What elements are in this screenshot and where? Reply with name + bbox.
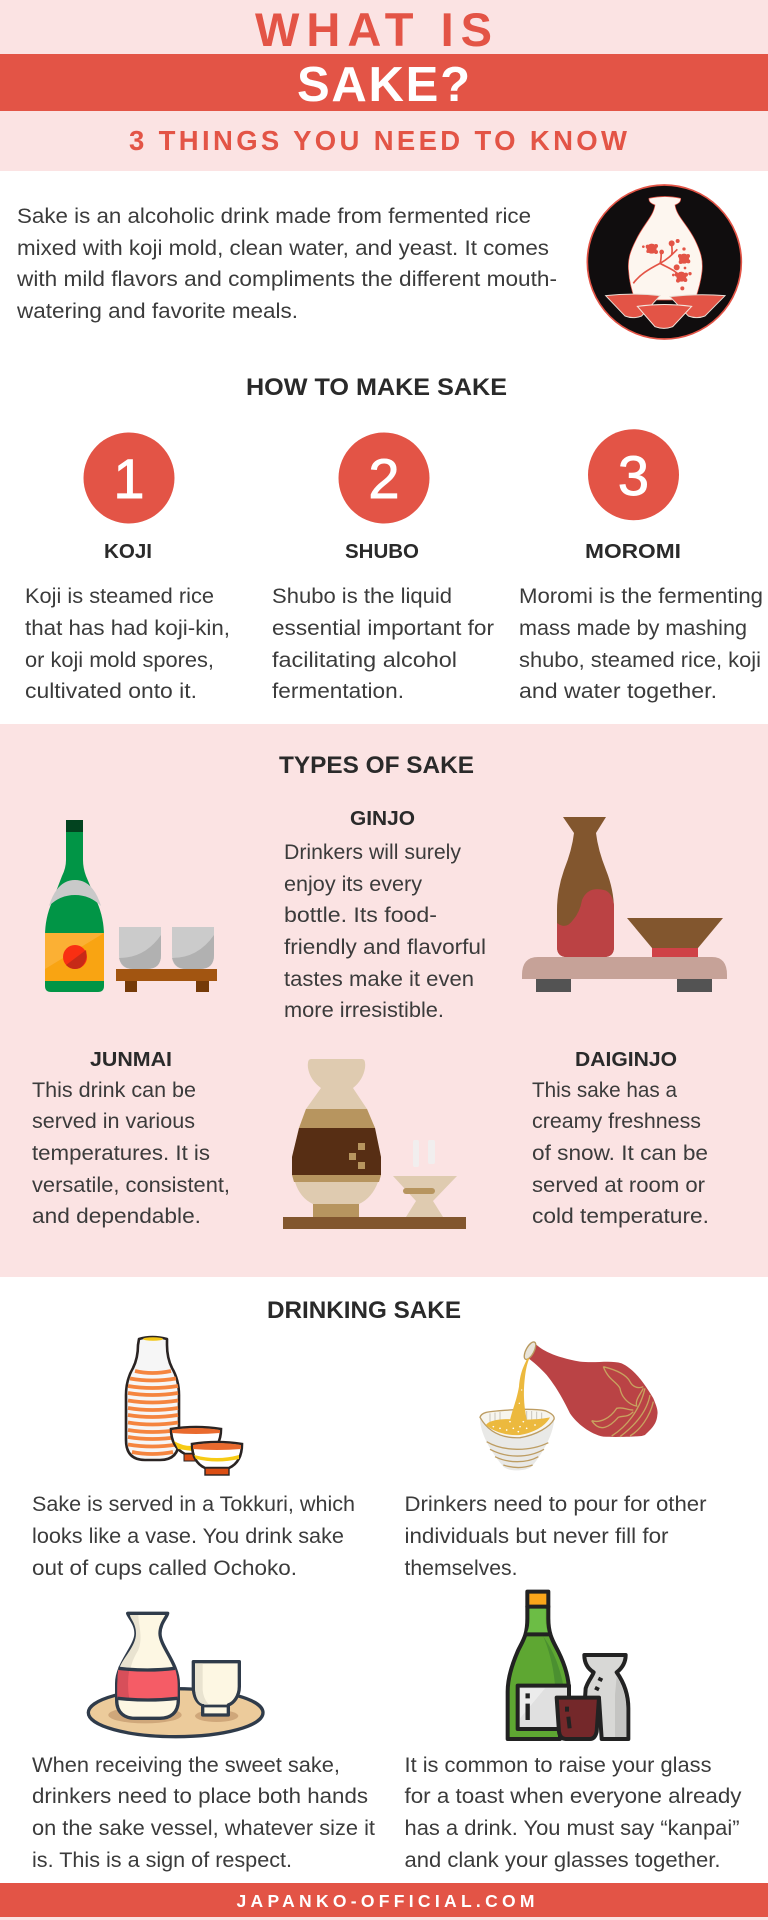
text: receiving with both hands: When receiving the sweet sake, (32, 1754, 340, 1777)
text: receiving with both hands: is. This is a sign of respect. (32, 1849, 292, 1872)
intro text: Sake is an alcoholic drink made from fermented rice (17, 205, 531, 228)
heading: types of sake: TYPES OF SAKE (279, 752, 474, 779)
type description (532, 1079, 709, 1228)
step text: Koji is steamed rice (25, 585, 214, 608)
icon: green bottle, grey tokkuri and red cup (508, 1592, 628, 1739)
text: kanpai toast: has a drink. You must say “kanpai” (404, 1817, 740, 1840)
intro text (16, 205, 557, 323)
step name: KOJI (104, 540, 152, 563)
heading: how to make sake: HOW TO MAKE SAKE (246, 374, 507, 401)
text: pouring: Drinkers need to pour for other (404, 1493, 707, 1516)
type description (284, 841, 486, 1022)
ginjo block (284, 807, 486, 1022)
text: receiving with both hands (32, 1754, 375, 1872)
footer band (0, 1883, 768, 1920)
type description: served at room or (532, 1174, 705, 1197)
step text: essential important for (272, 617, 494, 640)
step text: Shubo is the liquid (272, 585, 452, 608)
number badge 2: 2 (368, 447, 400, 510)
type description: creamy freshness (532, 1110, 701, 1133)
step 2: shubo (272, 432, 494, 703)
text: kanpai toast: for a toast when everyone already (404, 1785, 742, 1808)
step text (272, 585, 494, 703)
icon: pouring sake into a cup (480, 1340, 658, 1470)
panel: types of sake (0, 724, 768, 1277)
step text: cultivated onto it. (25, 680, 197, 703)
number badge 3: 3 (618, 444, 649, 507)
step text: facilitating alcohol (272, 649, 457, 672)
text: kanpai toast: It is common to raise your glass (404, 1754, 712, 1777)
number badge 2 (338, 432, 430, 524)
step 3: moromi (519, 429, 763, 703)
number badge 1 (84, 432, 174, 524)
text: tokkuri (32, 1493, 355, 1580)
intro text: mixed with koji mold, clean water, and yeast. It comes (17, 237, 549, 260)
type description: bottle. Its food- (284, 904, 437, 927)
type name: JUNMAI (90, 1048, 172, 1071)
type name: GINJO (350, 807, 415, 830)
heading: drinking sake: DRINKING SAKE (267, 1297, 461, 1324)
subtitle: 3 THINGS YOU NEED TO KNOW (129, 125, 627, 156)
text: receiving with both hands: on the sake vessel, whatever size it (32, 1817, 375, 1840)
text: tokkuri: looks like a vase. You drink sake (32, 1525, 344, 1548)
type description: and dependable. (32, 1205, 201, 1228)
daiginjo block (532, 1048, 709, 1228)
step 1: koji (25, 432, 230, 703)
junmai block (32, 1048, 230, 1228)
text: kanpai toast: and clank your glasses together. (404, 1849, 720, 1872)
step text: mass made by mashing (519, 617, 747, 640)
type description: versatile, consistent, (32, 1174, 230, 1197)
step name: SHUBO (345, 540, 419, 563)
footer url: JAPANKO-OFFICIAL.COM (236, 1891, 534, 1911)
type name: DAIGINJO (575, 1048, 677, 1071)
text: tokkuri: Sake is served in a Tokkuri, which (32, 1493, 355, 1516)
icon: beige and brown tokkuri with cup on tray (283, 1059, 466, 1229)
icon: striped tokkuri with two cups (126, 1337, 242, 1475)
intro text: with mild flavors and compliments the different mouth- (16, 268, 557, 291)
step text: shubo, steamed rice, koji (519, 649, 761, 672)
panel: header (0, 0, 768, 171)
text: tokkuri: out of cups called Ochoko. (32, 1557, 297, 1580)
step text: that has had koji-kin, (25, 617, 230, 640)
step text: and water together. (519, 680, 717, 703)
step text: Moromi is the fermenting (519, 585, 763, 608)
type description: enjoy its every (284, 873, 423, 896)
text: pouring: individuals but never fill for (404, 1525, 668, 1548)
type description: served in various (32, 1110, 195, 1133)
type description: temperatures. It is (32, 1142, 210, 1165)
icon: brown and red flask with cup on stand (522, 817, 727, 992)
icon: sake vase and cups medallion (587, 185, 741, 339)
type description: cold temperature. (532, 1205, 709, 1228)
type description: This sake has a (532, 1079, 677, 1102)
text: receiving with both hands: drinkers need to place both hands (32, 1785, 368, 1808)
text: pouring (404, 1493, 707, 1580)
step name: MOROMI (585, 540, 681, 563)
step text (519, 585, 763, 703)
step text (25, 585, 230, 703)
type description: more irresistible. (284, 999, 444, 1022)
number badge 1: 1 (113, 447, 145, 510)
step text: fermentation. (272, 680, 404, 703)
type description: tastes make it even (284, 968, 474, 991)
icon: green bottle with cups on tray (45, 820, 217, 992)
text: pouring: themselves. (404, 1557, 518, 1580)
number badge 3 (588, 429, 679, 520)
type description: Drinkers will surely (284, 841, 461, 864)
type description: of snow. It can be (532, 1142, 708, 1165)
type description (32, 1079, 230, 1228)
text: kanpai toast (404, 1754, 742, 1872)
intro text: watering and favorite meals. (16, 300, 298, 323)
type description: friendly and flavorful (284, 936, 486, 959)
title line: SAKE?: SAKE? (297, 58, 470, 112)
type description: This drink can be (32, 1079, 196, 1102)
step text: or koji mold spores, (25, 649, 214, 672)
title line: WHAT IS: WHAT IS (255, 3, 492, 56)
icon: bottle and cup on round tray (88, 1613, 263, 1737)
